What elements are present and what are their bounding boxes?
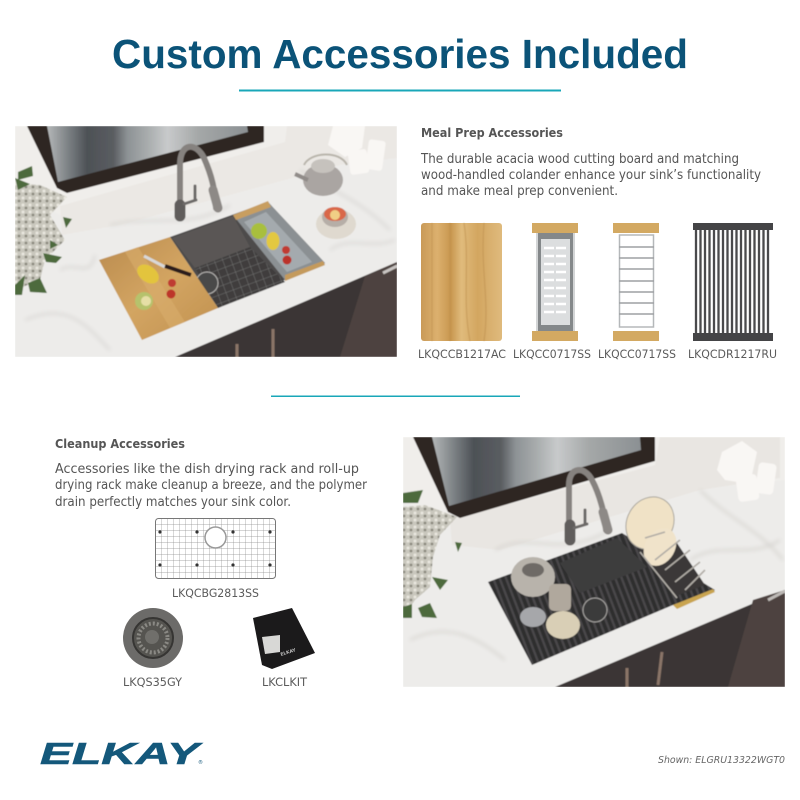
wall and backsplash <box>403 437 785 530</box>
text: meal prep description: and make meal prep convenient. <box>421 184 618 199</box>
drain ring <box>196 272 218 294</box>
label: LKQCC0717SS <box>513 347 591 361</box>
candles <box>328 126 386 175</box>
logo: Elkay: ® <box>198 759 203 766</box>
text: meal prep description <box>420 152 761 199</box>
product: bottom grid <box>156 518 276 600</box>
product: roll-up drying rack <box>688 223 777 361</box>
title: Custom Accessories Included <box>112 31 688 77</box>
window <box>27 126 264 193</box>
plant <box>403 490 462 618</box>
cabinet handles <box>237 329 273 357</box>
faucet <box>569 470 608 540</box>
text: cleanup description <box>55 462 368 510</box>
product: cleaning kit: ELKAY <box>280 647 297 658</box>
marble veining <box>410 490 783 660</box>
colander <box>233 201 325 281</box>
photo: cleanup kitchen sink <box>403 437 785 687</box>
product: colander frame <box>598 223 676 361</box>
cutting board <box>99 237 218 340</box>
heading: cleanup: Cleanup Accessories <box>55 436 185 451</box>
label: LKQCCB1217AC <box>418 347 506 361</box>
marble veining <box>42 192 386 346</box>
photo: meal prep kitchen sink <box>15 126 397 357</box>
label: LKQCDR1217RU <box>688 347 777 361</box>
caption: model shown: Shown: ELGRU13322WGT0 <box>658 755 785 766</box>
faucet <box>180 147 218 218</box>
canisters <box>717 441 777 502</box>
section divider <box>271 396 520 397</box>
label: LKCLKIT <box>262 675 308 689</box>
cabinet handles <box>627 652 662 687</box>
text: cleanup description: Accessories like the dish drying rack and roll-up <box>55 462 359 477</box>
text: meal prep description: wood-handled colander enhance your sink’s functionality <box>421 168 761 183</box>
dish rack with plates <box>625 496 706 599</box>
logo: Elkay: ELKAY <box>40 736 204 771</box>
wall and backsplash <box>15 126 397 215</box>
product: cleaning kit <box>253 608 315 689</box>
product: cutting board <box>418 223 506 361</box>
teapot and dishes <box>511 557 580 639</box>
text: cleanup description: drying rack make cleanup a breeze, and the polymer <box>55 478 368 493</box>
teapot <box>295 154 347 196</box>
product: colander <box>513 223 591 361</box>
title underline <box>239 90 561 92</box>
logo: Elkay <box>40 736 204 771</box>
cabinet base <box>175 262 397 357</box>
plant <box>15 166 72 295</box>
label: LKQS35GY <box>123 675 183 689</box>
heading: meal prep: Meal Prep Accessories <box>421 125 563 140</box>
sink basin <box>170 202 325 308</box>
sink with drying mat <box>488 533 715 665</box>
text: meal prep description: The durable acacia wood cutting board and matching <box>420 152 739 167</box>
label: LKQCBG2813SS <box>172 586 259 600</box>
text: cleanup description: drain perfectly matches your sink color. <box>55 495 291 510</box>
product: polymer drain <box>123 608 183 689</box>
teacup and saucer <box>316 207 356 239</box>
window <box>413 437 655 518</box>
cabinet base <box>555 604 752 687</box>
label: LKQCC0717SS <box>598 347 676 361</box>
